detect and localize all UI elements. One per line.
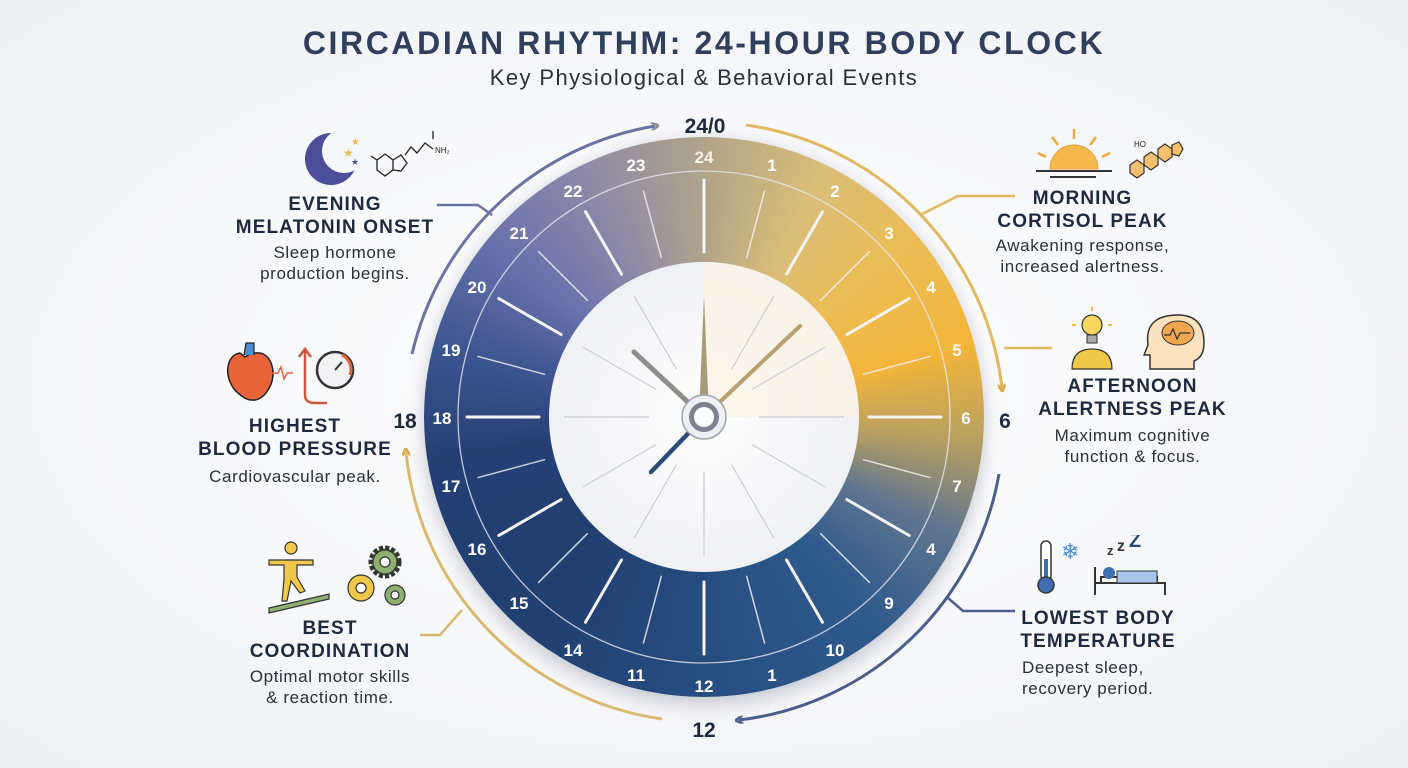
hour numbers: 17 — [442, 477, 460, 496]
hour numbers: 5 — [952, 341, 962, 360]
hour numbers: 9 — [884, 594, 894, 613]
hour numbers: 4 — [926, 278, 936, 297]
hour numbers: 20 — [468, 278, 486, 297]
description — [1055, 426, 1210, 466]
description: & reaction time. — [266, 688, 394, 707]
icon: sun and cortisol molecule: HO — [1134, 140, 1146, 149]
heading — [997, 188, 1168, 232]
description: Maximum cognitive — [1055, 426, 1210, 445]
icon: lightbulb person and brain — [1071, 307, 1205, 370]
icon: heart and gauge — [226, 342, 354, 404]
hour numbers: 4 — [926, 540, 936, 559]
heading — [236, 194, 434, 238]
icon: thermometer snowflake sleeping — [1037, 535, 1166, 595]
subtitle: Key Physiological & Behavioral Events — [490, 65, 918, 90]
heading — [198, 416, 392, 460]
cardinal labels: 18 — [393, 410, 417, 433]
description — [1022, 658, 1154, 698]
icon: thermometer snowflake sleeping: z — [1107, 543, 1114, 558]
heading: HIGHEST — [249, 416, 341, 437]
panel: morning cortisol — [996, 129, 1184, 276]
icon: sun and cortisol molecule — [1036, 129, 1184, 179]
icon: thermometer snowflake sleeping: ❄ — [1061, 539, 1079, 564]
hour numbers: 19 — [442, 341, 460, 360]
heading: BLOOD PRESSURE — [198, 439, 392, 460]
heading: CORTISOL PEAK — [997, 211, 1168, 232]
panel: evening melatonin — [236, 131, 450, 283]
heading — [1038, 376, 1227, 420]
hour numbers: 24 — [695, 148, 714, 167]
heading: MELATONIN ONSET — [236, 217, 434, 238]
description — [260, 243, 410, 283]
heading: LOWEST BODY — [1021, 608, 1175, 629]
description: recovery period. — [1022, 679, 1154, 698]
hour numbers: 10 — [826, 641, 844, 660]
hour numbers: 2 — [830, 182, 840, 201]
heading: ALERTNESS PEAK — [1038, 399, 1227, 420]
icon: thermometer snowflake sleeping: z — [1117, 538, 1125, 555]
cardinal labels: 24/0 — [685, 115, 725, 138]
icon: balance figure and gears — [268, 541, 406, 614]
icon: moon and melatonin molecule — [305, 131, 450, 185]
hour numbers — [433, 148, 971, 696]
hour numbers: 3 — [884, 224, 894, 243]
heading: AFTERNOON — [1067, 376, 1198, 397]
heading: COORDINATION — [250, 641, 410, 662]
cardinal labels: 12 — [692, 719, 716, 742]
description: Sleep hormone — [273, 243, 397, 262]
hour numbers: 12 — [695, 677, 713, 696]
hour numbers: 21 — [510, 224, 528, 243]
description — [996, 236, 1169, 276]
cardinal labels: 6 — [999, 410, 1011, 433]
description: increased alertness. — [1000, 257, 1165, 276]
panel: best coordination — [250, 541, 410, 707]
hour numbers: 11 — [627, 666, 645, 685]
icon: moon and melatonin molecule: ★ — [351, 157, 359, 167]
icon: moon and melatonin molecule: ★ — [343, 146, 354, 160]
heading: TEMPERATURE — [1020, 631, 1176, 652]
heading: BEST — [302, 618, 358, 639]
ticks — [467, 180, 941, 654]
panel: afternoon alertness — [1038, 307, 1227, 466]
title: CIRCADIAN RHYTHM: 24-HOUR BODY CLOCK — [303, 25, 1105, 61]
panel: lowest body temperature — [1020, 535, 1176, 698]
description: function & focus. — [1065, 447, 1200, 466]
connector lines — [420, 196, 1052, 635]
description: Cardiovascular peak. — [209, 467, 381, 486]
cardinal labels — [393, 115, 1011, 742]
inner white face — [549, 262, 859, 572]
clock ring — [424, 137, 984, 697]
hour numbers: 1 — [767, 666, 777, 685]
icon: moon and melatonin molecule: ★ — [351, 137, 360, 148]
description: production begins. — [260, 264, 410, 283]
hour numbers: 22 — [564, 182, 582, 201]
heading: EVENING — [288, 194, 382, 215]
heading: MORNING — [1033, 188, 1132, 209]
hour numbers: 14 — [564, 641, 583, 660]
hour numbers: 6 — [961, 409, 971, 428]
hour numbers: 16 — [468, 540, 486, 559]
hour numbers: 18 — [433, 409, 451, 428]
outer arcs with arrows — [412, 126, 655, 354]
heading — [250, 618, 410, 662]
panel: highest blood pressure — [198, 342, 392, 486]
inner ring line — [458, 171, 950, 663]
hour numbers: 1 — [767, 156, 777, 175]
heading — [1020, 608, 1176, 652]
hour numbers: 23 — [627, 156, 645, 175]
icon: moon and melatonin molecule: NH₂ — [435, 146, 450, 155]
description — [250, 667, 410, 707]
description: Optimal motor skills — [250, 667, 410, 686]
hour numbers: 7 — [952, 477, 962, 496]
description: Deepest sleep, — [1022, 658, 1144, 677]
description: Awakening response, — [996, 236, 1169, 255]
clock hands — [634, 295, 800, 472]
hour numbers: 15 — [510, 594, 528, 613]
